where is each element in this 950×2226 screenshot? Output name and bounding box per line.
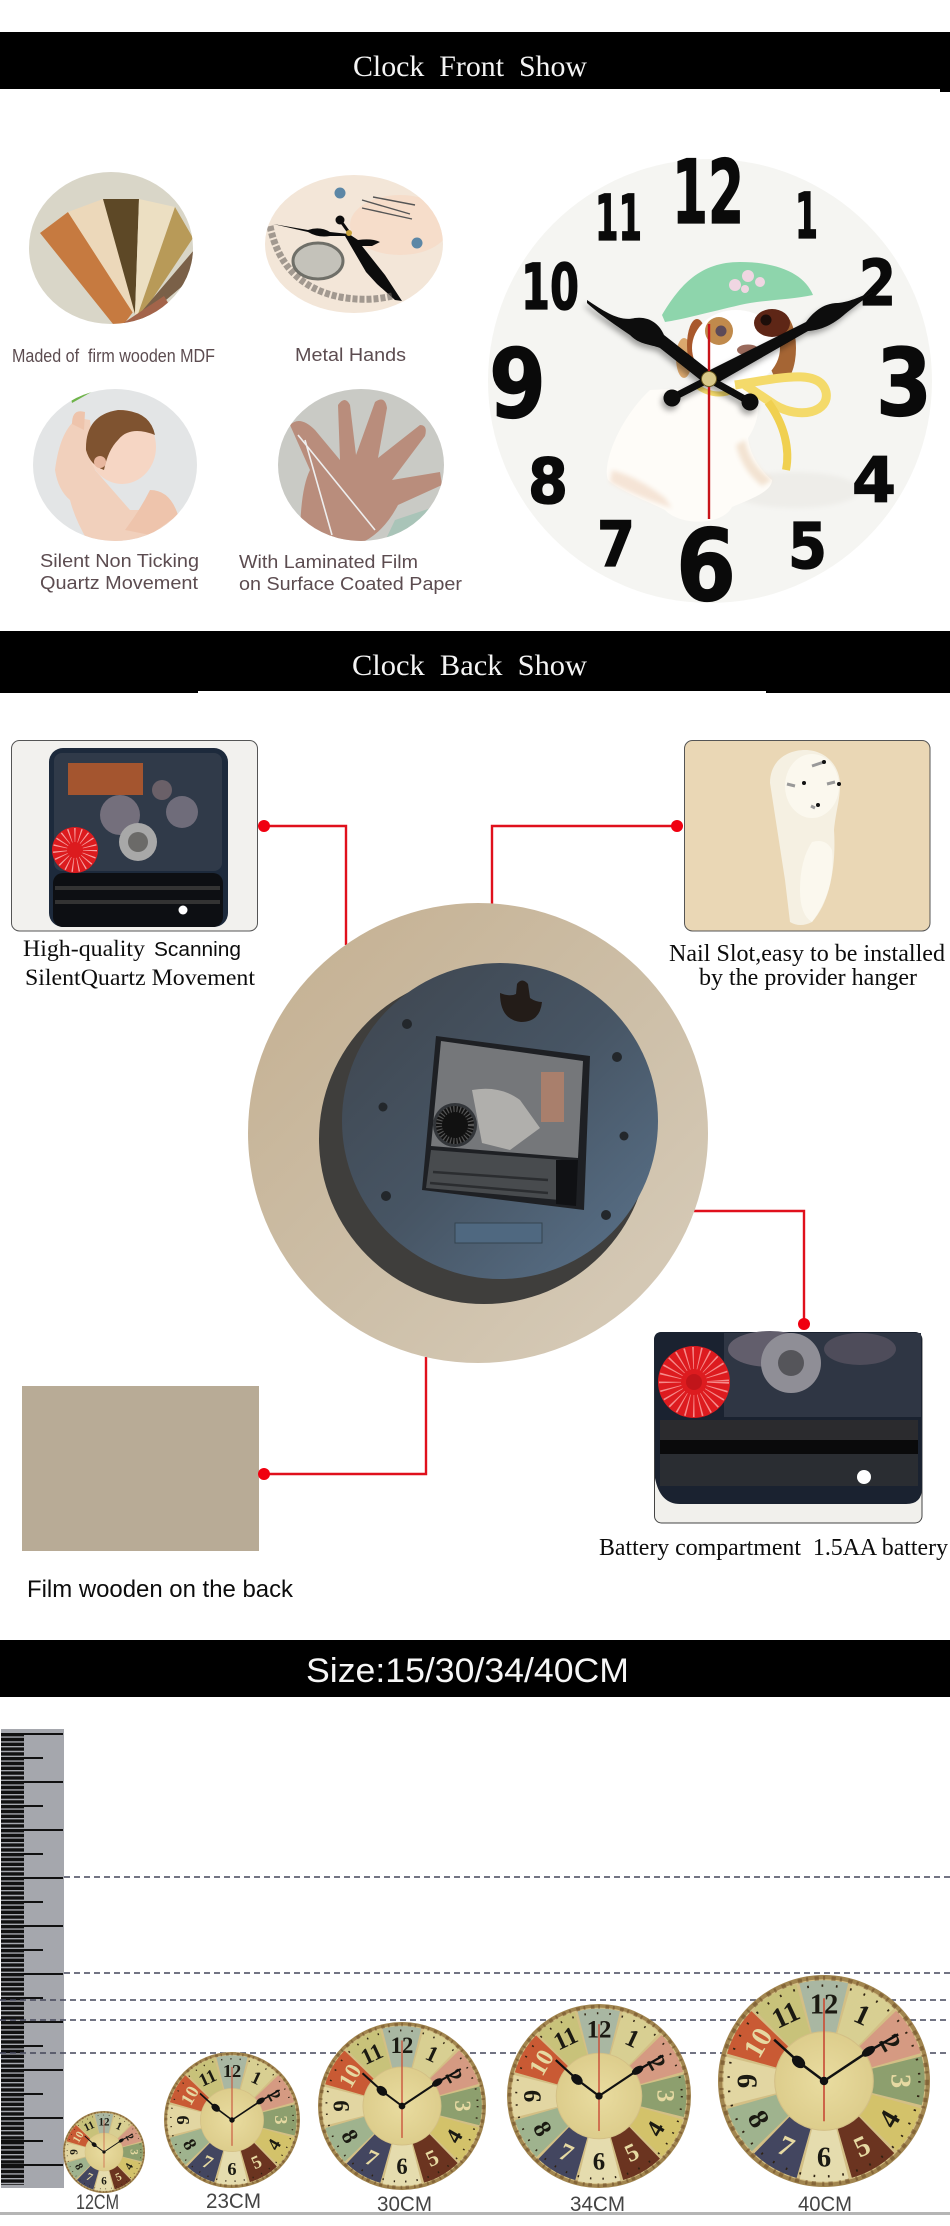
label: 23CM: 23CM <box>206 2190 261 2213</box>
clock: 30CM: 1 <box>422 2040 443 2068</box>
header: size <box>0 1640 950 1697</box>
card: quartz movement <box>12 740 258 931</box>
clock: 40CM: 5 <box>849 2129 875 2164</box>
clock: 34CM: 5 <box>621 2138 643 2168</box>
caption: movement: SilentQuartz Movement <box>25 965 256 990</box>
clock: 30CM: 8 <box>336 2125 364 2147</box>
clock numbers: 1 <box>795 180 818 253</box>
header: Clock Front Show <box>0 32 950 92</box>
clock numbers <box>489 141 932 624</box>
card: hook <box>684 740 930 931</box>
clock numbers: 4 <box>852 444 896 517</box>
clock: 34CM: 2 <box>641 2051 671 2075</box>
clock: 34CM: 11 <box>550 2022 582 2056</box>
caption: laminated film: With Laminated Film <box>239 552 418 572</box>
panel: material features <box>12 170 462 594</box>
caption: hook <box>669 941 945 991</box>
clock: 34CM <box>507 2004 691 2188</box>
red dot: hook <box>671 820 683 832</box>
clock: 12CM: 3 <box>128 2149 140 2155</box>
clock: 30CM: 2 <box>440 2065 468 2087</box>
battery label recess <box>455 1223 542 1243</box>
clock: 34CM: 4 <box>641 2117 671 2141</box>
label: 34CM: 34CM <box>570 2193 625 2216</box>
red dot: movement <box>258 820 270 832</box>
clock: 40CM <box>718 1975 930 2187</box>
caption: board: Film wooden on the back <box>27 1576 294 1603</box>
card: wood board sample <box>22 1386 259 1551</box>
hanging keyhole <box>500 980 542 1022</box>
caption: laminated film: on Surface Coated Paper <box>239 574 462 594</box>
ruler <box>1 1729 64 2188</box>
baseline bar <box>0 2212 950 2215</box>
caption: laminated film <box>239 552 462 594</box>
connector lines <box>264 826 804 1474</box>
icon: wood veneer fan <box>25 170 195 326</box>
illustration: puppy in green hat <box>607 262 860 522</box>
clock: 12CM: 10 <box>71 2129 87 2145</box>
label: 30CM: 30CM <box>377 2193 432 2216</box>
clock: 23CM: 12 <box>223 2061 241 2081</box>
icon: hand behind laminated film <box>275 385 447 545</box>
clock: 12CM: 8 <box>72 2161 85 2173</box>
clock: 40CM: 7 <box>773 2129 799 2164</box>
clock: 40CM: 6 <box>817 2141 831 2173</box>
dashed size guides <box>0 1877 950 2053</box>
clock numbers: 11 <box>595 182 642 255</box>
header: Clock Front Show: Clock Front Show <box>353 50 587 83</box>
clock: 12CM: 6 <box>101 2176 107 2188</box>
clock: 30CM <box>318 2022 486 2190</box>
clock: 12CM: 11 <box>82 2119 97 2134</box>
clock: 30CM: 9 <box>329 2100 354 2112</box>
clock: 40CM: 2 <box>872 2029 907 2057</box>
clock numbers: 12 <box>672 141 744 244</box>
clock: 34CM: 1 <box>621 2024 643 2054</box>
clock: 12CM: 4 <box>123 2161 136 2172</box>
icon: metal hands dial <box>265 175 443 313</box>
clock: 30CM: 10 <box>333 2060 366 2092</box>
clock numbers: 10 <box>521 251 579 324</box>
clock numbers: 5 <box>788 510 827 583</box>
clock: 12CM: 12 <box>98 2116 110 2128</box>
clock: 40CM: 9 <box>732 2074 764 2088</box>
clock: 23CM: 4 <box>263 2136 285 2153</box>
caption: wooden MDF: Maded of firm wooden MDF <box>12 346 215 366</box>
clock numbers: 6 <box>676 509 736 624</box>
clock: 12CM: 2 <box>123 2132 136 2143</box>
mounting studs <box>378 1019 628 1220</box>
clock: 34CM: 8 <box>527 2117 557 2141</box>
clock: 34CM: 9 <box>519 2090 546 2102</box>
clock: 23CM: 5 <box>248 2151 265 2173</box>
clock: 23CM: 9 <box>173 2115 193 2125</box>
clock hands <box>587 288 880 410</box>
caption: silent movement <box>40 551 199 593</box>
red battery wheel <box>52 827 98 873</box>
clock: 30CM: 4 <box>440 2125 468 2147</box>
clock: 30CM: 5 <box>422 2144 443 2172</box>
red battery wheel <box>658 1346 730 1418</box>
caption: metal hands: Metal Hands <box>295 345 406 365</box>
clock centre cap <box>702 372 716 386</box>
caption: silent movement: Quartz Movement <box>40 573 198 593</box>
red dot: board <box>258 1468 270 1480</box>
icon: sleeping baby <box>30 385 200 545</box>
clock face with puppy <box>488 141 932 624</box>
clock: 34CM: 12 <box>587 2016 611 2043</box>
clock numbers: 8 <box>528 445 568 518</box>
clock: 23CM: 10 <box>177 2083 203 2108</box>
clock: 40CM: 1 <box>849 1998 875 2033</box>
clock: 12CM: 9 <box>68 2149 80 2155</box>
caption: movement <box>23 936 256 990</box>
clock numbers: 2 <box>859 247 896 320</box>
header: size: Size:15/30/34/40CM <box>306 1652 629 1690</box>
clock: 34CM: 6 <box>593 2149 605 2176</box>
clock: 30CM: 12 <box>391 2033 413 2058</box>
clock: 40CM: 10 <box>737 2022 779 2063</box>
clock: 34CM: 10 <box>524 2045 560 2080</box>
quartz movement in back <box>422 1036 590 1210</box>
clock: 23CM: 6 <box>227 2159 237 2179</box>
clock: 30CM: 7 <box>361 2144 382 2172</box>
header: Clock Back Show <box>0 631 950 693</box>
clock: 40CM: 3 <box>884 2074 916 2088</box>
clock: 23CM: 3 <box>271 2115 291 2125</box>
clock numbers: 3 <box>876 329 932 437</box>
clock: 12CM: 7 <box>84 2171 95 2184</box>
caption: silent movement: Silent Non Ticking <box>40 551 199 571</box>
label: 12CM: 12CM <box>76 2191 119 2214</box>
clock: 12CM: 5 <box>114 2171 124 2184</box>
caption: movement: Scanning <box>154 939 241 961</box>
header: Clock Back Show: Clock Back Show <box>352 649 587 682</box>
caption: hook: by the provider hanger <box>699 965 917 991</box>
clock: 23CM: 8 <box>179 2136 201 2153</box>
clock numbers: 7 <box>597 508 635 581</box>
clock numbers: 9 <box>489 330 546 440</box>
clock: 23CM: 7 <box>199 2151 216 2173</box>
second hand <box>708 324 710 519</box>
clock: 34CM: 3 <box>652 2090 679 2102</box>
label: 40CM: 40CM <box>798 2193 852 2216</box>
clock: 23CM <box>164 2052 300 2188</box>
red dot: battery <box>798 1318 810 1330</box>
clock: 30CM: 11 <box>357 2038 387 2070</box>
card: battery compartment <box>654 1331 922 1523</box>
clock: 23CM: 2 <box>263 2087 285 2104</box>
clock: 23CM: 11 <box>195 2065 220 2091</box>
clock back photo <box>248 903 708 1363</box>
clock: 12CM: 1 <box>114 2120 124 2133</box>
caption: battery: Battery compartment 1.5AA battery <box>599 1535 948 1561</box>
clock: 30CM: 3 <box>450 2100 475 2112</box>
clock: 40CM: 8 <box>741 2105 776 2133</box>
caption: movement: High-quality <box>23 936 146 961</box>
clock: 23CM: 1 <box>248 2067 265 2089</box>
caption: hook: Nail Slot,easy to be installed <box>669 941 945 967</box>
clock: 12CM <box>63 2111 145 2193</box>
clock: 30CM: 6 <box>396 2154 408 2179</box>
clock: 40CM: 12 <box>810 1989 838 2021</box>
clock: 40CM: 11 <box>767 1995 805 2035</box>
clock: 40CM: 4 <box>872 2105 907 2133</box>
clock: 34CM: 7 <box>555 2138 577 2168</box>
